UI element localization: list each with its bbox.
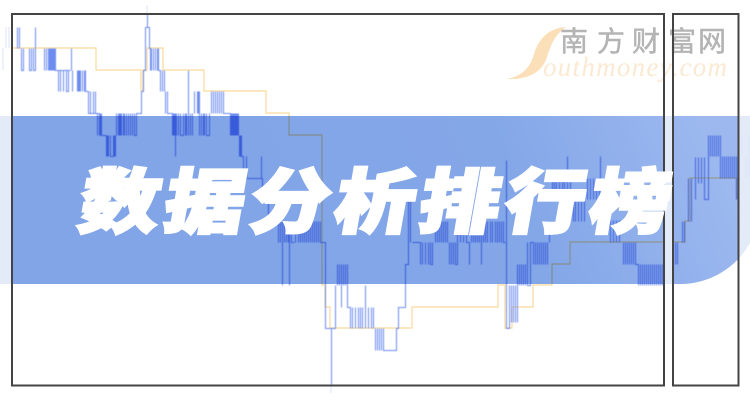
background band (pale outer part) bbox=[0, 116, 750, 284]
watermark logo swoosh bbox=[507, 27, 566, 79]
watermark Chinese name: 南方财富网 bbox=[560, 26, 726, 57]
background band (saturated part inside frames) bbox=[0, 116, 750, 284]
title: 数据分析排行榜 bbox=[73, 165, 677, 243]
frame: secondary chart border bbox=[673, 14, 738, 386]
watermark domain: outhmoney.com bbox=[543, 52, 727, 82]
moving-average step line bbox=[12, 48, 739, 328]
